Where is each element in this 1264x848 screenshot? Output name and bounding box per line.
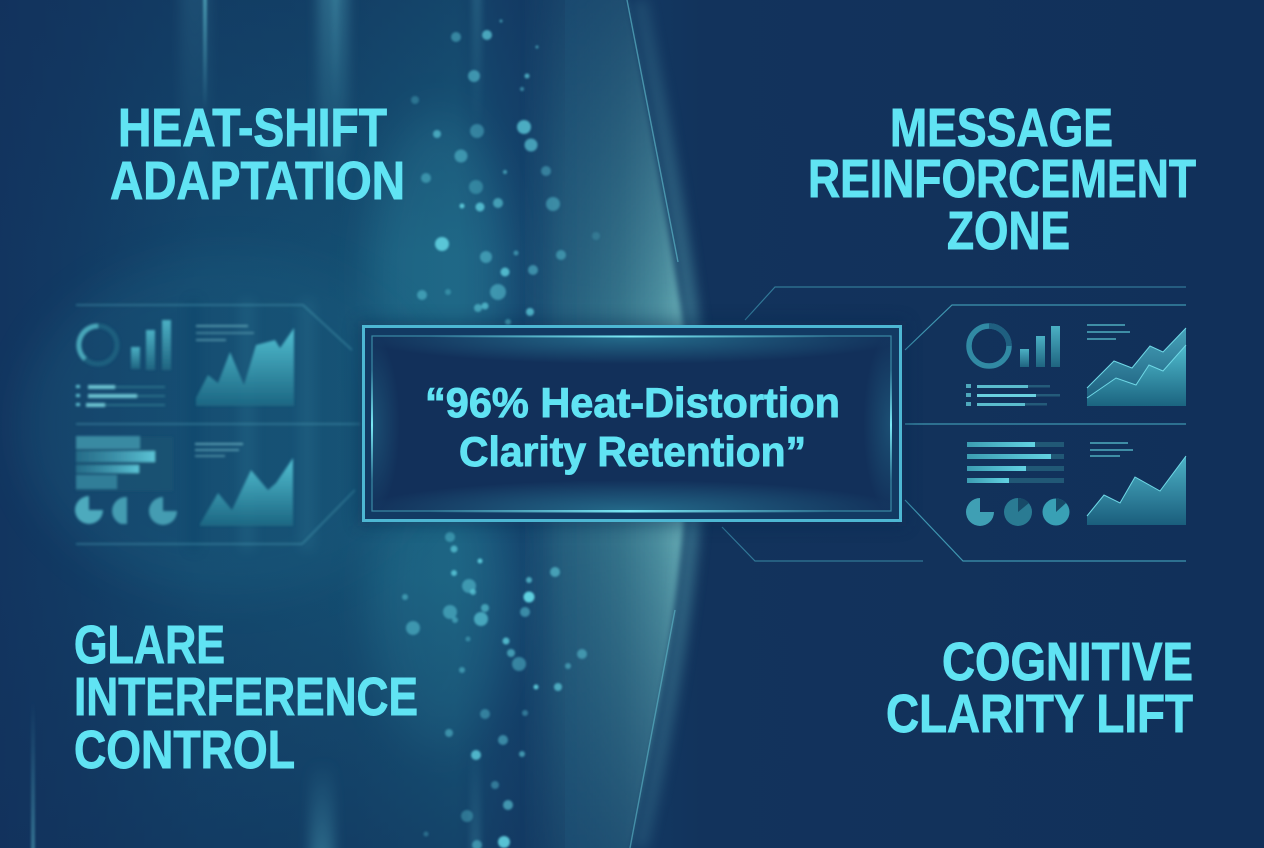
left donut chart: [79, 326, 117, 364]
heading: Heat-Shift Adaptation: HEAT-SHIFT: [118, 98, 387, 158]
left connector lines: [76, 305, 360, 544]
callout quote text: Clarity Retention”: [459, 428, 806, 475]
heading: Glare Interference Control: CONTROL: [74, 720, 295, 780]
heading: Heat-Shift Adaptation: [110, 98, 405, 211]
callout quote text: [425, 379, 840, 475]
left area chart upper: [196, 325, 294, 406]
left pie charts: [75, 496, 177, 525]
right area chart lower: [1087, 442, 1186, 525]
heading: Message Reinforcement Zone: MESSAGE: [890, 98, 1113, 158]
left bar chart: [131, 320, 171, 370]
heading: Heat-Shift Adaptation: ADAPTATION: [110, 151, 405, 211]
right horizontal bars: [967, 442, 1064, 483]
heading: Cognitive Clarity Lift: [886, 632, 1193, 744]
heading: Cognitive Clarity Lift: CLARITY LIFT: [886, 684, 1193, 744]
central callout box: [344, 312, 919, 540]
callout quote text: “96% Heat-Distortion: [425, 379, 840, 426]
right progress list: [966, 384, 1060, 406]
background: teal mist behind particles: [0, 0, 565, 848]
background: lens edge highlight lines: [627, 0, 678, 848]
left horizontal bars: [76, 436, 173, 491]
right donut chart: [969, 326, 1009, 366]
left area chart lower: [195, 443, 293, 526]
right connector lines: [722, 287, 1186, 561]
right pie charts: [966, 498, 1070, 526]
panel: left blurred dashboards: [75, 305, 360, 544]
right bar chart: [1020, 326, 1060, 367]
background: vertical light streaks: [31, 0, 482, 848]
panel: right dashboards: [722, 287, 1186, 561]
heading: Glare Interference Control: [74, 615, 418, 780]
right area chart upper: [1087, 324, 1186, 406]
background: glowing particles: [402, 20, 600, 848]
heading: Glare Interference Control: GLARE: [74, 615, 225, 675]
heading: Glare Interference Control: INTERFERENCE: [74, 667, 418, 727]
heading: Message Reinforcement Zone: [808, 98, 1196, 261]
background: curved lens of light: [525, 0, 692, 848]
heading: Message Reinforcement Zone: ZONE: [947, 201, 1070, 261]
left progress list: [76, 385, 165, 407]
heading: Cognitive Clarity Lift: COGNITIVE: [942, 632, 1193, 692]
